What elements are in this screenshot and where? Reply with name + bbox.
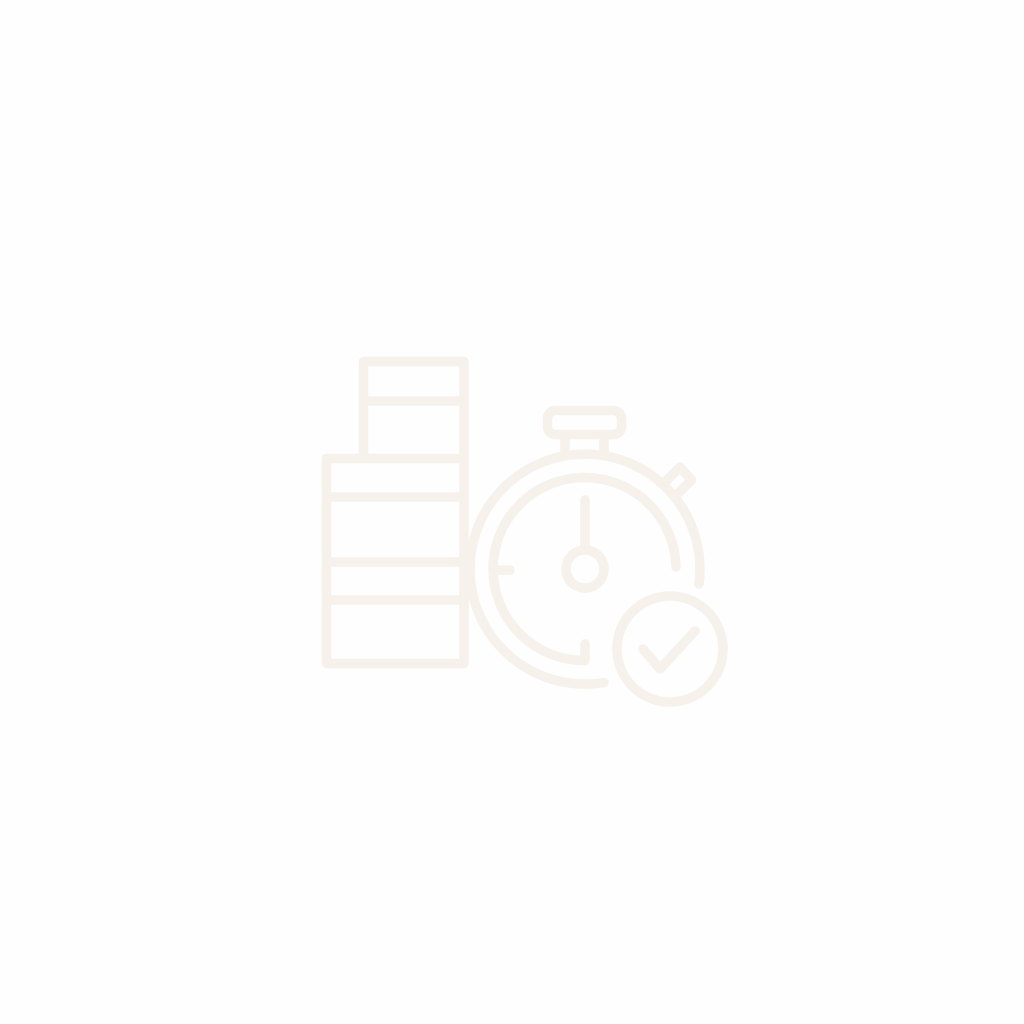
stopwatch hand — [580, 500, 590, 547]
stopwatch hub — [566, 550, 604, 588]
stopwatch inner ring — [493, 478, 676, 661]
stopwatch side knob — [666, 467, 692, 496]
icon: check badge — [617, 596, 723, 702]
stopwatch tick — [494, 565, 510, 575]
stopwatch button — [548, 410, 622, 434]
icon: stopwatch — [470, 410, 700, 684]
icon: upper coin stack — [364, 362, 464, 458]
stopwatch neck — [565, 435, 604, 455]
stopwatch outer ring — [470, 454, 700, 684]
icon: lower coin stack — [326, 458, 464, 664]
